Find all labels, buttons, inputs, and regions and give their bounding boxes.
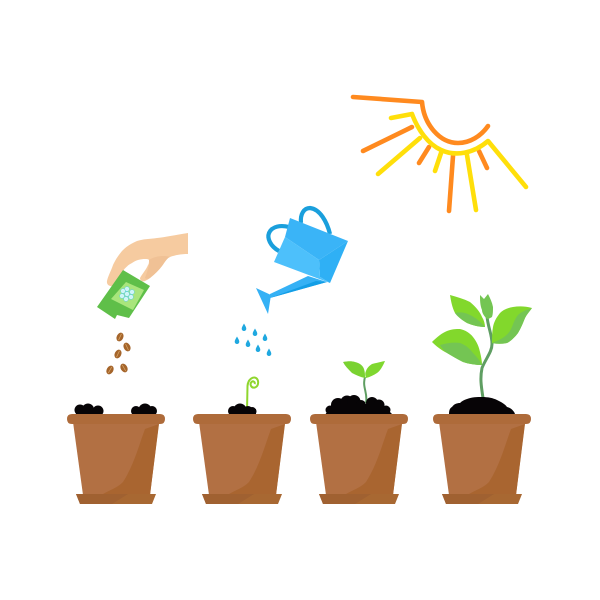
pot bbox=[193, 414, 291, 504]
can right face bbox=[319, 241, 348, 283]
can front light face bbox=[274, 237, 330, 283]
hand bbox=[107, 233, 188, 286]
packet label bbox=[111, 282, 144, 310]
sun orange rays bbox=[363, 127, 487, 211]
stem bbox=[364, 377, 366, 403]
pot 1: seeds planted bbox=[67, 404, 165, 504]
thumb shade bbox=[145, 256, 170, 279]
leaf right bbox=[492, 306, 532, 344]
seed packet bbox=[97, 270, 150, 319]
sun yellow arc bbox=[391, 114, 526, 187]
spout bbox=[270, 276, 327, 298]
soil mound bbox=[449, 397, 515, 414]
pot bbox=[67, 414, 165, 504]
soil bbox=[325, 395, 393, 415]
right leaf bbox=[365, 361, 385, 378]
icon: watering can bbox=[256, 208, 348, 314]
water drops bbox=[235, 324, 271, 356]
left leaf bbox=[343, 361, 365, 378]
bud bbox=[480, 294, 493, 319]
pot bbox=[310, 414, 408, 504]
can body top face bbox=[285, 218, 348, 260]
leaf left bbox=[432, 329, 482, 365]
pot bbox=[433, 414, 531, 504]
pot 3: seedling bbox=[310, 361, 408, 504]
pot 4: young plant bbox=[432, 294, 532, 504]
icon: sun bbox=[353, 97, 526, 211]
can handles bbox=[268, 208, 330, 251]
sun yellow rays bbox=[378, 138, 476, 210]
sun orange arc bbox=[353, 97, 488, 143]
packet flower bbox=[120, 287, 134, 301]
leaf upper left bbox=[450, 295, 485, 327]
soil bbox=[74, 404, 157, 416]
pot 2: sprout bbox=[193, 378, 291, 504]
icon: hand holding seed packet bbox=[97, 233, 188, 319]
spout rose bbox=[256, 288, 271, 314]
soil bbox=[228, 404, 256, 416]
seeds falling bbox=[105, 331, 132, 376]
curled sprout bbox=[247, 378, 258, 411]
stem bbox=[481, 316, 492, 398]
